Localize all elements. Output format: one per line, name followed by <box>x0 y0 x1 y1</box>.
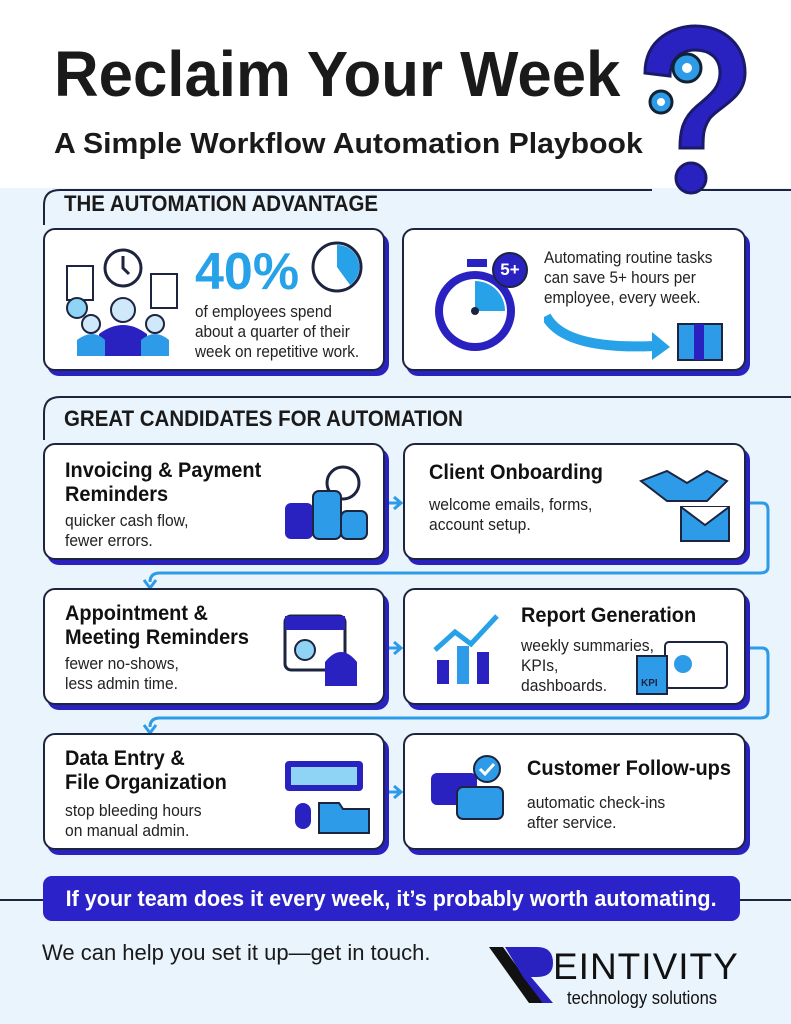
badge: 5+: 5+ <box>500 260 520 279</box>
icon: people with clocks <box>66 248 178 356</box>
icon: stopwatch <box>435 259 515 351</box>
stat number 40%: 40% <box>195 243 299 301</box>
banner: call to action <box>43 876 740 921</box>
icon: quarter clock <box>312 242 362 292</box>
card: data entry: on manual admin. <box>65 821 189 840</box>
logo: Reintivity: technology solutions <box>567 988 717 1008</box>
text: saving description: Automating routine tasks <box>544 248 712 267</box>
text: saving description <box>544 248 712 307</box>
card: customer follow-ups <box>403 733 746 850</box>
card: client onboarding: welcome emails, forms, <box>429 495 592 514</box>
banner: call to action: If your team does it every week, it’s probably worth automating. <box>66 886 717 911</box>
top white header background <box>0 0 791 188</box>
footer text: We can help you set it up—get in touch. <box>42 940 430 965</box>
card: report generation: KPIs, <box>521 656 558 675</box>
icon: bar chart with arrow <box>433 614 499 684</box>
card: appointment reminders: fewer no-shows, <box>65 654 179 673</box>
panel: 5+ hours <box>402 228 746 371</box>
text: stat description: of employees spend <box>195 302 332 321</box>
text: saving description: employee, every week. <box>544 288 700 307</box>
icon: dashboard <box>636 641 728 695</box>
card: invoicing: Reminders <box>65 483 168 506</box>
card: invoicing: quicker cash flow, <box>65 511 188 530</box>
icon: keyboard, mouse, folder <box>285 761 370 834</box>
title: Reclaim Your Week <box>54 38 620 110</box>
card: report generation: dashboards. <box>521 676 607 695</box>
icon: coins and clock <box>285 466 368 540</box>
card: data entry: Data Entry & <box>65 747 185 770</box>
arrow to money <box>544 314 723 361</box>
card: customer follow-ups: Customer Follow-ups <box>527 757 731 780</box>
card: invoicing: fewer errors. <box>65 531 153 550</box>
badge: 5+ <box>492 252 528 288</box>
text: stat description <box>195 302 359 361</box>
panel: 40% stat <box>43 228 385 371</box>
heading: great candidates: GREAT CANDIDATES FOR AUTOMATION <box>64 406 463 431</box>
logo: Reintivity <box>489 946 739 1008</box>
card: appointment reminders <box>43 588 385 705</box>
card: invoicing <box>43 443 385 560</box>
card: client onboarding <box>403 443 746 560</box>
subtitle: A Simple Workflow Automation Playbook <box>54 128 643 160</box>
card: data entry <box>43 733 385 850</box>
card: data entry: stop bleeding hours <box>65 801 202 820</box>
card: appointment reminders: Meeting Reminders <box>65 626 249 649</box>
card: report generation: weekly summaries, <box>521 636 654 655</box>
card: report generation: Report Generation <box>521 604 696 627</box>
card: client onboarding: account setup. <box>429 515 531 534</box>
heading: the automation advantage: THE AUTOMATION ADVANTAGE <box>64 191 378 216</box>
logo: Reintivity: EINTIVITY <box>553 946 739 987</box>
icon: handshake and envelope <box>639 470 730 542</box>
card: appointment reminders: less admin time. <box>65 674 178 693</box>
icon: chat bubbles <box>431 755 504 820</box>
card: customer follow-ups: automatic check-ins <box>527 793 665 812</box>
card: data entry: File Organization <box>65 771 227 794</box>
card: report generation <box>403 588 746 705</box>
card: client onboarding: Client Onboarding <box>429 461 603 484</box>
card: invoicing: Invoicing & Payment <box>65 459 261 482</box>
text: saving description: can save 5+ hours per <box>544 268 696 287</box>
text: stat description: about a quarter of their <box>195 322 350 341</box>
icon: question mark with gears <box>644 24 746 194</box>
icon: calendar and bell <box>284 614 357 686</box>
card: appointment reminders: Appointment & <box>65 602 208 625</box>
icon: dashboard: KPI <box>641 678 658 689</box>
card: customer follow-ups: after service. <box>527 813 617 832</box>
text: stat description: week on repetitive work. <box>195 342 359 361</box>
